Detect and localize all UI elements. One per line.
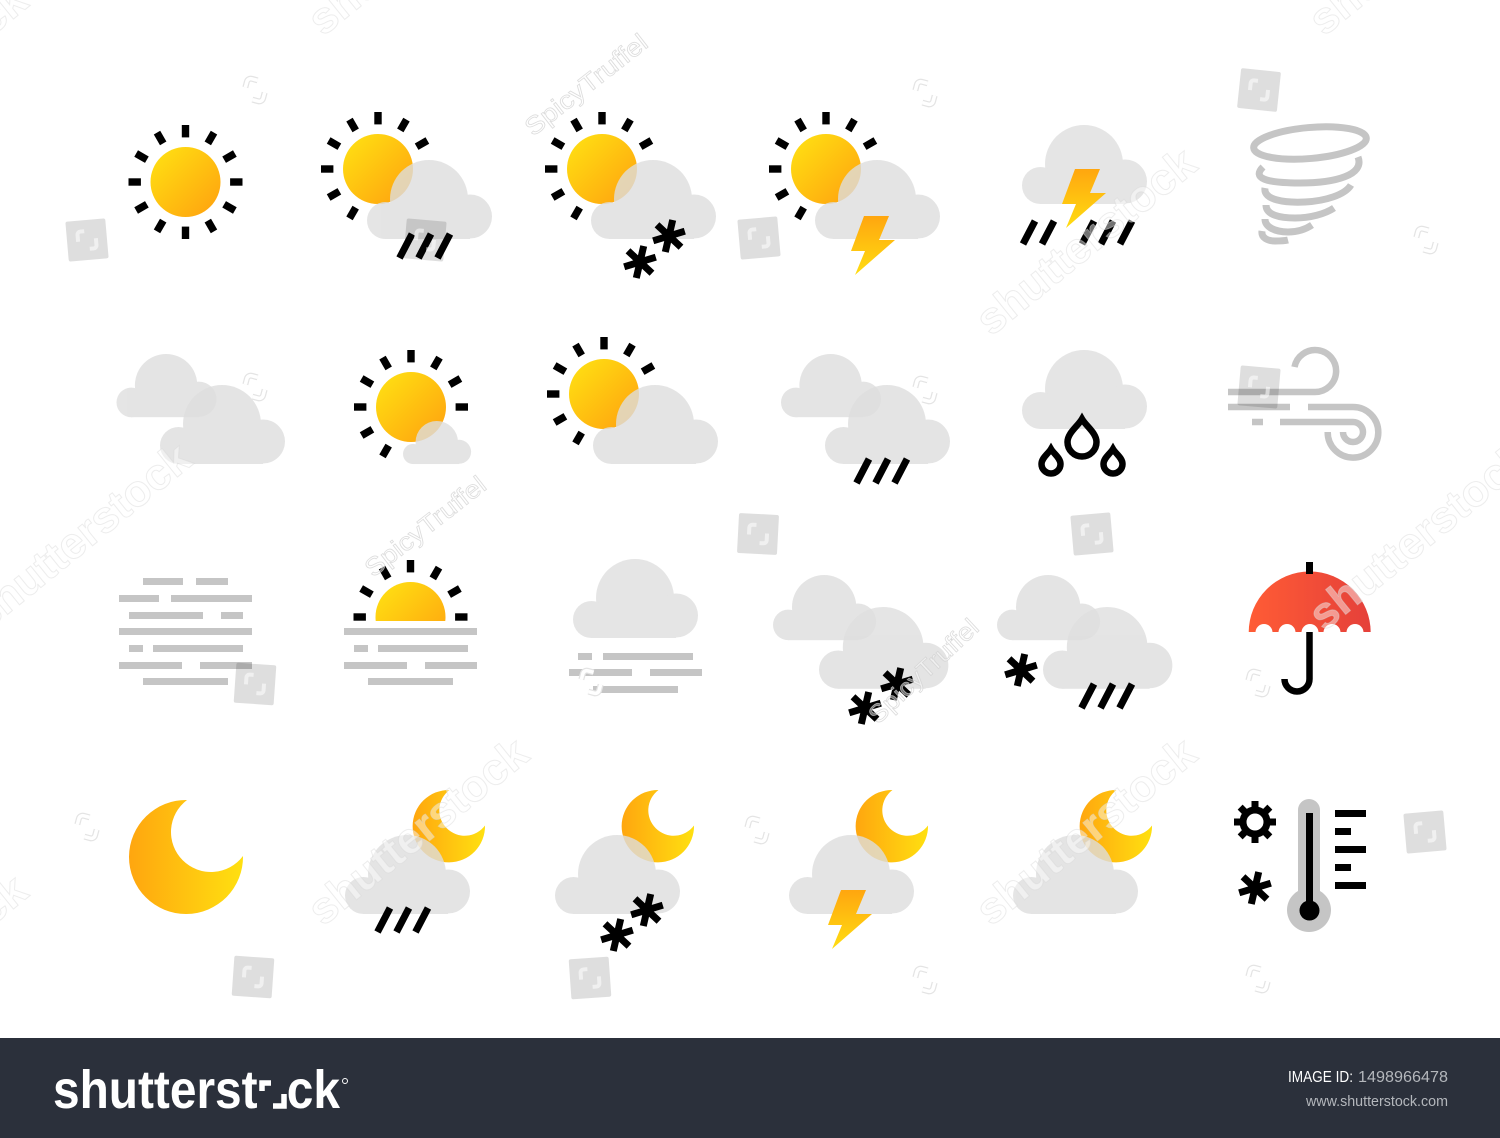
icon: tornado <box>1252 123 1368 241</box>
watermark text: shutterstock <box>966 138 1206 345</box>
icon: sun with cloud and rain <box>321 112 492 258</box>
icon: moon with cloud and lightning <box>789 790 928 949</box>
shutterstock logo: shutterstock <box>53 1060 341 1120</box>
watermark author text: SpicyTruffel <box>863 613 984 729</box>
icon: sunrise over fog <box>344 560 477 685</box>
watermark text: shutterstock <box>298 728 538 935</box>
icon: sun with small cloud <box>354 350 471 464</box>
icon: fog <box>119 578 252 685</box>
icon: two clouds with sleet <box>997 575 1172 708</box>
icon: sun behind cloud <box>547 337 718 464</box>
image id: IMAGE ID: <box>1288 1069 1353 1086</box>
icon: sun with cloud and snow <box>545 112 716 278</box>
icon: two clouds <box>116 354 285 464</box>
watermark squares <box>65 68 1447 999</box>
icon: sun with cloud and lightning <box>769 112 940 275</box>
watermark author text: SpicyTruffel <box>359 471 492 583</box>
icon: thermometer with sun and snow symbols <box>1234 799 1366 932</box>
icon: sun <box>128 125 242 239</box>
icon: moon with cloud and rain <box>345 790 485 932</box>
icon: moon with cloud and snow <box>555 790 694 951</box>
watermark author text: SpicyTruffel <box>519 29 653 142</box>
image id: 1498966478 <box>1358 1069 1448 1086</box>
image id <box>1288 1069 1448 1086</box>
website address: www.shutterstock.com <box>1305 1094 1448 1110</box>
icon: umbrella <box>1240 562 1380 692</box>
icon: thunderstorm cloud with rain <box>1022 125 1147 244</box>
watermark text: shutterstock <box>966 728 1206 935</box>
icon: crescent moon <box>129 800 243 914</box>
icon: cloud over fog <box>569 559 702 693</box>
watermark author text <box>359 29 984 729</box>
icon: two clouds with snow <box>773 575 948 724</box>
icon: moon with cloud <box>1013 790 1152 914</box>
watermark swirl marks <box>75 78 1438 992</box>
icon: two clouds with rain <box>781 354 950 483</box>
footer bar <box>0 1038 1500 1138</box>
icon: cloud with water drops <box>1022 350 1147 474</box>
icon: wind <box>1228 350 1378 458</box>
